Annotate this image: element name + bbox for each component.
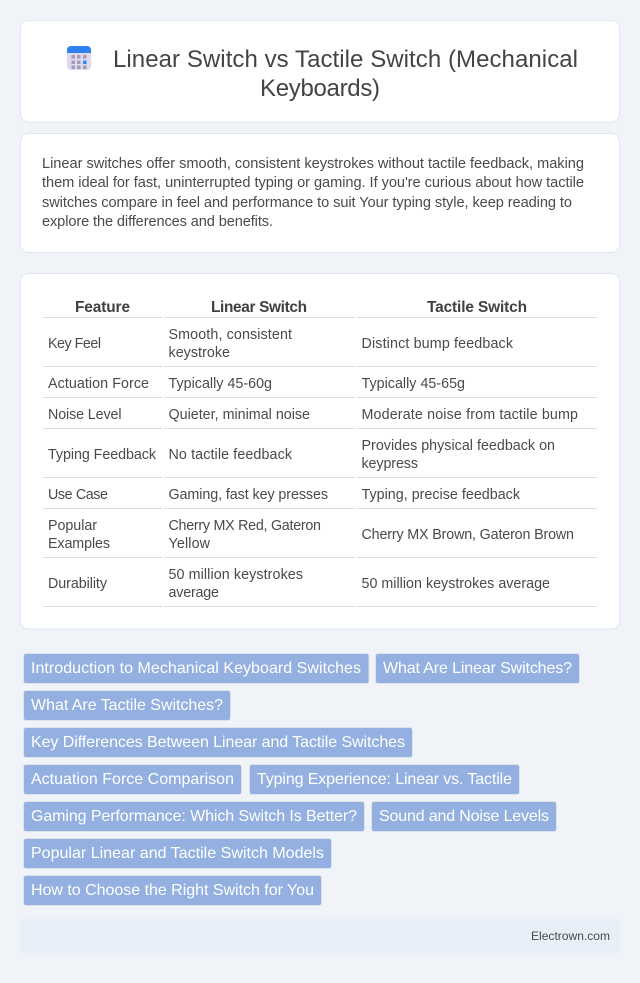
tag: popular models: Popular Linear and Tactile Switch Models <box>31 845 324 862</box>
row: key feel: Distinct bump feedback <box>362 336 514 352</box>
row: durability: 50 million keystrokes <box>168 567 303 583</box>
title: Linear Switch vs Tactile Switch (Mechanical <box>113 46 578 73</box>
row: use case: Use Case <box>48 487 108 503</box>
tag: introduction: Introduction to Mechanical Keyboard Switches <box>31 660 361 677</box>
title: Keyboards) <box>260 75 380 102</box>
table header row: Feature <box>75 299 130 316</box>
row: popular examples <box>48 518 574 552</box>
tag: tactile switches: What Are Tactile Switches? <box>31 697 223 714</box>
table header row: Linear Switch <box>211 299 307 316</box>
footer credit: Electrown.com <box>531 929 610 943</box>
table rules <box>43 317 597 607</box>
intro text <box>42 156 584 230</box>
row: typing feedback: No tactile feedback <box>168 447 293 463</box>
row: noise level <box>48 407 578 423</box>
table header row: Tactile Switch <box>427 299 527 316</box>
title <box>113 46 578 102</box>
tag: actuation force: Actuation Force Comparison <box>31 771 234 788</box>
footer <box>20 919 620 953</box>
intro text: explore the differences and benefits. <box>42 214 273 230</box>
row: key feel <box>48 327 514 361</box>
intro text: switches compare in feel and performance to suit Your typing style, keep reading to <box>42 195 572 211</box>
tag: key differences: Key Differences Between Linear and Tactile Switches <box>31 734 405 751</box>
row: popular examples: Yellow <box>168 536 211 552</box>
row: key feel: Key Feel <box>48 336 101 352</box>
row: noise level: Noise Level <box>48 407 122 423</box>
intro panel <box>20 134 620 252</box>
row: actuation force: Actuation Force <box>48 376 149 392</box>
icon: keyboard keypad calendar <box>67 46 91 70</box>
tag: gaming performance: Gaming Performance: Which Switch Is Better? <box>31 808 357 825</box>
topic tags <box>24 654 580 906</box>
comparison table panel <box>20 274 620 629</box>
row: actuation force <box>48 376 465 392</box>
row: noise level: Quieter, minimal noise <box>168 407 310 423</box>
row: durability: 50 million keystrokes average <box>362 576 550 592</box>
tag: key differences <box>24 728 412 758</box>
row: popular examples: Examples <box>48 536 110 552</box>
row: typing feedback <box>48 438 555 472</box>
row: use case <box>48 487 521 503</box>
intro text: them ideal for fast, uninterrupted typing or gaming. If you're curious about how tactile <box>42 175 584 191</box>
row: key feel: keystroke <box>168 345 230 361</box>
row: durability: Durability <box>48 576 108 592</box>
tag: popular models <box>24 838 332 868</box>
row: actuation force: Typically 45-60g <box>168 376 272 392</box>
tag: gaming performance <box>24 802 364 832</box>
row: typing feedback: keypress <box>362 456 418 472</box>
tag: linear switches <box>376 654 580 684</box>
row: actuation force: Typically 45-65g <box>362 376 465 392</box>
tag: typing experience: Typing Experience: Linear vs. Tactile <box>257 771 512 788</box>
table header row <box>75 299 527 316</box>
tag: typing experience <box>250 764 520 794</box>
tag: sound and noise: Sound and Noise Levels <box>379 808 549 825</box>
row: popular examples: Popular <box>48 518 97 534</box>
row: typing feedback: Typing Feedback <box>48 447 157 463</box>
header panel <box>20 20 620 122</box>
row: use case: Typing, precise feedback <box>362 487 521 503</box>
tag: how to choose <box>24 876 322 906</box>
intro text: Linear switches offer smooth, consistent keystrokes without tactile feedback, making <box>42 156 584 172</box>
tag: sound and noise <box>372 802 556 832</box>
tag: actuation force <box>24 764 242 794</box>
row: key feel: Smooth, consistent <box>168 327 292 343</box>
row: popular examples: Cherry MX Brown, Gateron Brown <box>362 527 574 543</box>
tag: introduction <box>24 654 369 684</box>
row: durability: average <box>168 585 219 601</box>
row: durability <box>48 567 550 601</box>
row: noise level: Moderate noise from tactile bump <box>362 407 578 423</box>
tag: linear switches: What Are Linear Switches? <box>383 660 572 677</box>
row: popular examples: Cherry MX Red, Gateron <box>168 518 321 534</box>
row: use case: Gaming, fast key presses <box>168 487 328 503</box>
tag: how to choose: How to Choose the Right Switch for You <box>31 882 314 899</box>
tag: tactile switches <box>24 690 230 720</box>
row: typing feedback: Provides physical feedback on <box>362 438 555 454</box>
